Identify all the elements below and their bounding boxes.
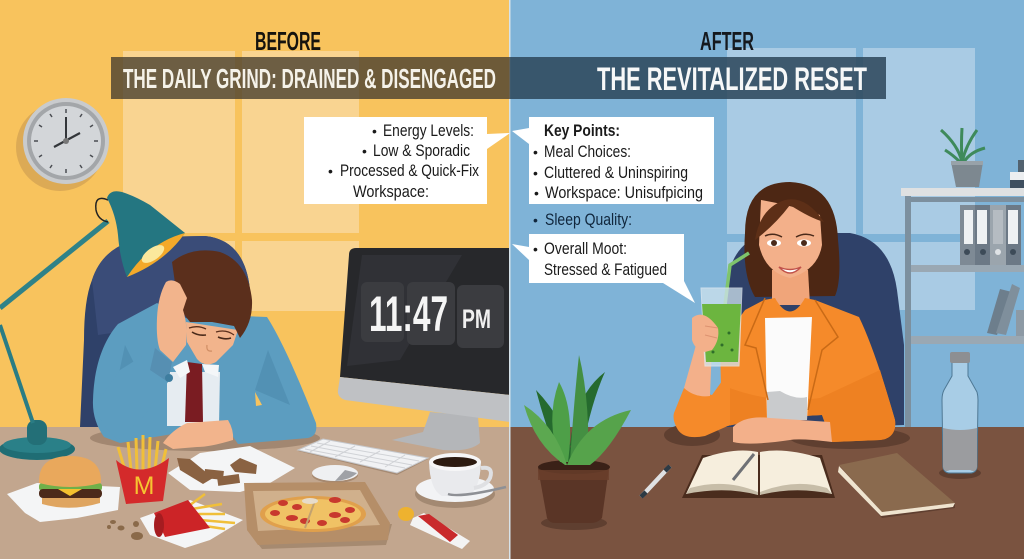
callout: after key points: Cluttered & Uninspiring	[544, 164, 688, 182]
smoothie glass	[692, 253, 749, 366]
bookshelf	[901, 128, 1024, 427]
icon: wall clock	[16, 98, 109, 191]
woman with smoothie	[664, 182, 910, 449]
food: fries box logo: M	[134, 472, 154, 500]
banner: before title: THE DAILY GRIND: DRAINED & DISENGAGED	[123, 63, 496, 94]
banner: before title	[111, 57, 510, 99]
panel: after scene	[510, 0, 1024, 559]
callout: after key points: •	[533, 165, 538, 181]
food: sauce packet	[398, 507, 470, 549]
callout: before key points: •	[328, 163, 333, 179]
closed notebook	[838, 453, 955, 518]
callout: after key points: •	[533, 144, 538, 160]
text: sleep quality: •	[533, 212, 538, 228]
keyboard	[298, 439, 428, 475]
food: spilled fries	[140, 494, 243, 548]
food: pizza box	[244, 482, 392, 549]
text: sleep quality: Sleep Quality:	[545, 211, 632, 229]
mouse	[312, 465, 358, 483]
office chair: after	[725, 233, 904, 427]
callout: before key points: Energy Levels:	[383, 122, 474, 140]
divider	[509, 0, 510, 559]
callout: before key points: •	[362, 143, 367, 159]
open notebook	[682, 450, 835, 498]
small potted plant	[941, 128, 985, 187]
desk lamp	[0, 191, 185, 460]
coffee cup	[415, 453, 506, 508]
callout: before key points: Low & Sporadic	[373, 142, 470, 160]
water bottle	[939, 352, 981, 479]
small shelf books	[1010, 160, 1024, 188]
food: fries box logo	[116, 435, 169, 504]
food: burger on paper	[7, 456, 120, 522]
panel: before scene	[0, 0, 510, 559]
callout: after key points: •	[534, 185, 539, 201]
office chair: before	[80, 236, 252, 427]
desk: before	[0, 427, 510, 559]
banner: after title: THE REVITALIZED RESET	[597, 61, 867, 97]
callout: overall mood: Stressed & Fatigued	[544, 261, 667, 279]
callout: after key points: Workspace: Unisufpicing	[545, 184, 703, 202]
computer monitor	[338, 248, 510, 450]
aloe plant	[524, 355, 631, 530]
callout: after key points: Key Points:	[544, 122, 620, 140]
callout: overall mood: •	[533, 241, 538, 257]
callout: after key points	[512, 117, 714, 204]
callout: overall mood	[512, 234, 695, 303]
binders	[960, 205, 1021, 265]
heading: before label: BEFORE	[255, 26, 321, 56]
callout: before key points: Processed & Quick-Fix	[340, 162, 480, 180]
man at desk	[90, 250, 320, 451]
heading: after label: AFTER	[700, 26, 754, 56]
banner: after title	[510, 57, 886, 99]
callout: before key points: •	[372, 123, 377, 139]
desk: after	[510, 427, 1024, 559]
food: crumbs	[107, 520, 143, 540]
food: brown snack on paper	[168, 446, 295, 492]
callout: before key points	[304, 117, 510, 204]
pen	[641, 466, 670, 497]
leaning books	[987, 284, 1024, 336]
callout: before key points: Workspace:	[353, 183, 429, 201]
callout: after key points: Meal Choices:	[544, 143, 631, 161]
callout: overall mood: Overall Moot:	[544, 240, 627, 258]
clock display time: 11:47	[369, 286, 448, 342]
clock display pm: PM	[462, 304, 491, 334]
